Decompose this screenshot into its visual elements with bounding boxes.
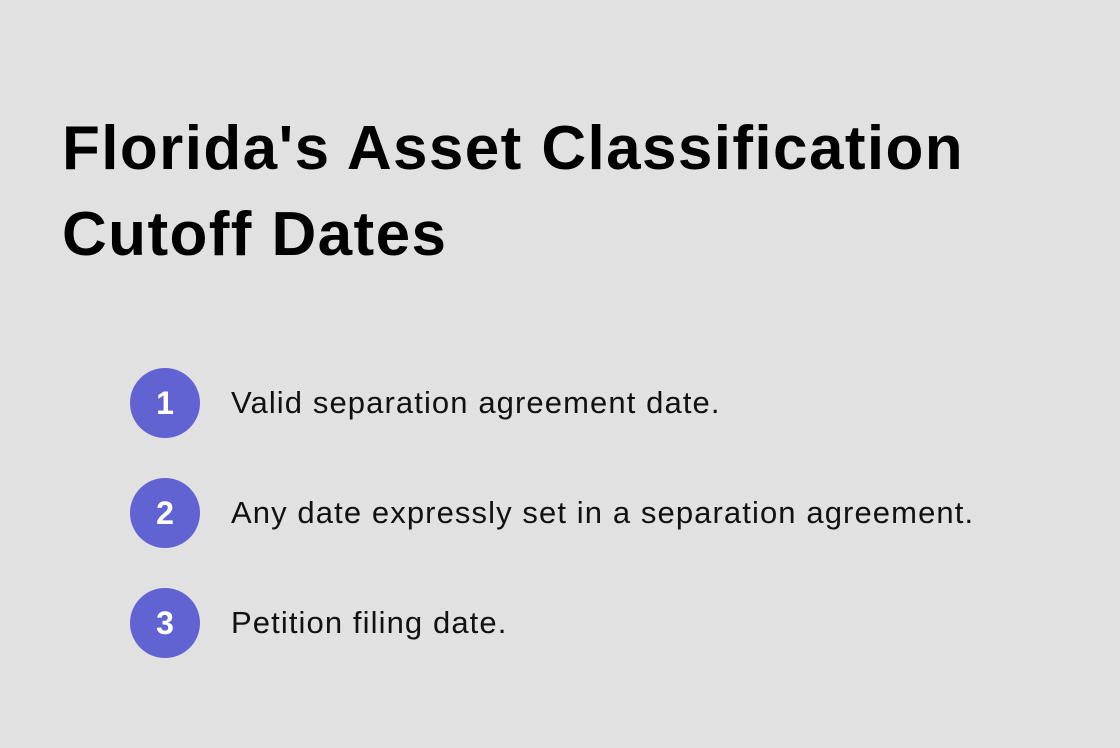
badge 1: 1 bbox=[156, 385, 174, 421]
item 1 bbox=[130, 368, 721, 438]
text 3: Petition filing date. bbox=[231, 605, 507, 640]
badge 3: 3 bbox=[156, 605, 174, 641]
text 2: Any date expressly set in a separation agreement. bbox=[231, 495, 974, 530]
title bbox=[62, 114, 964, 269]
text 1: Valid separation agreement date. bbox=[231, 385, 721, 420]
badge 2: 2 bbox=[156, 495, 174, 531]
item 2 bbox=[130, 478, 974, 548]
badge 1 bbox=[130, 368, 200, 438]
title: Florida's Asset Classification bbox=[62, 114, 964, 183]
title: Cutoff Dates bbox=[62, 200, 447, 269]
item 3 bbox=[130, 588, 507, 658]
badge 3 bbox=[130, 588, 200, 658]
badge 2 bbox=[130, 478, 200, 548]
